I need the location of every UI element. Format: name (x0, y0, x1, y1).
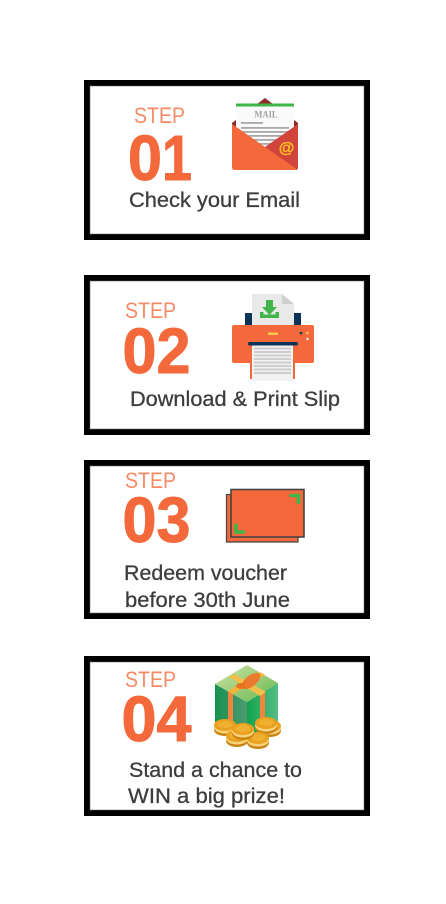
icon: printer (232, 294, 314, 381)
icon: vouchers (226, 490, 304, 542)
step 02 number: 02 (122, 315, 190, 387)
icon: envelope with mail: MAIL (254, 110, 278, 120)
panel: step 04 (87, 659, 367, 813)
step 03 caption: before 30th June (125, 588, 290, 612)
step 04 caption: Stand a chance to (129, 758, 302, 782)
icon: envelope with mail: @ (279, 140, 294, 157)
step 03 caption (124, 561, 290, 612)
step 01 caption: Check your Email (129, 188, 300, 212)
step 03 number: 03 (122, 484, 190, 556)
step 03 caption: Redeem voucher (124, 561, 287, 585)
step 04 label: STEP (125, 667, 176, 692)
step 04 number: 04 (122, 683, 192, 755)
step 03 label: STEP (125, 468, 176, 493)
panel: step 02 (87, 278, 367, 432)
step 04 caption (128, 758, 302, 808)
step 02 caption: Download & Print Slip (130, 387, 340, 411)
step 01 label: STEP (134, 103, 185, 128)
step 01 number: 0 (128, 122, 162, 194)
panel: step 01 (87, 83, 367, 237)
step 02 label: STEP (125, 298, 176, 323)
icon: gift box with coins (214, 665, 281, 749)
step 01 number: 1 (162, 122, 192, 194)
panel: step 03 (87, 463, 367, 616)
step 04 caption: WIN a big prize! (128, 784, 285, 808)
step 01 number (128, 122, 192, 194)
icon: envelope with mail (232, 98, 298, 170)
